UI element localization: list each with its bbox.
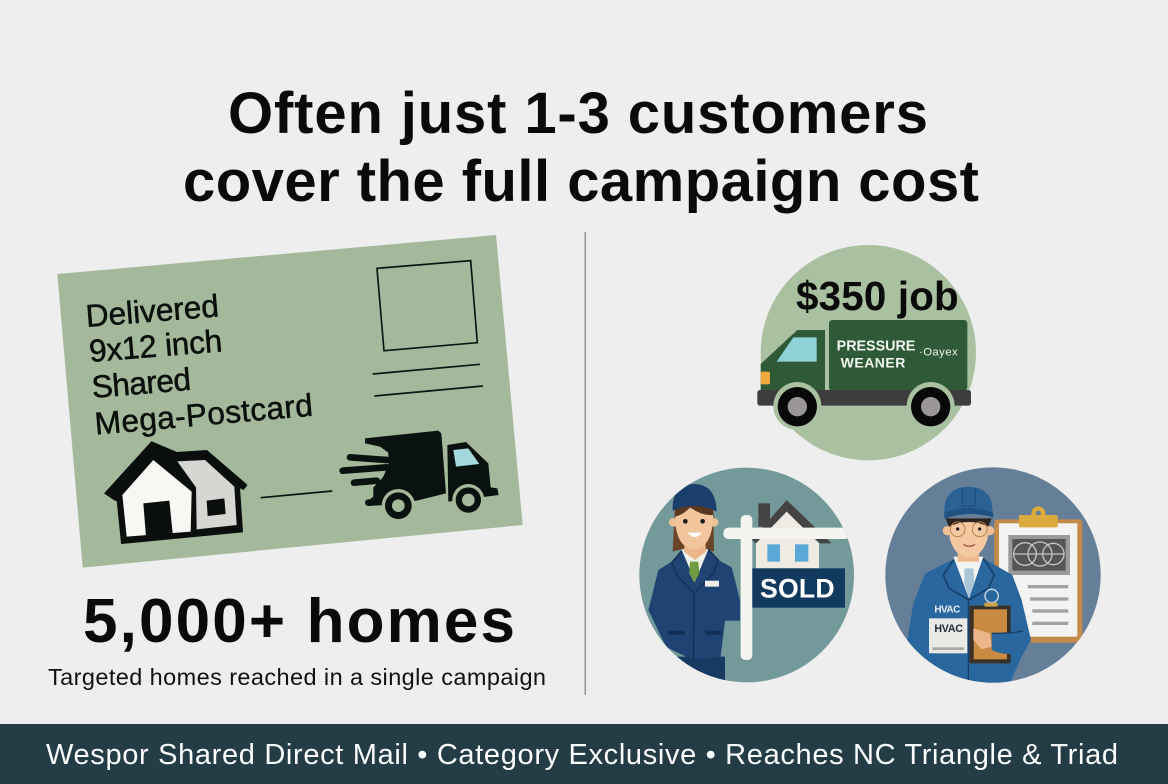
postcard text: 9x12 inch [88, 322, 223, 369]
route line [261, 491, 332, 498]
for-sale sign house [752, 500, 832, 568]
postcard text: Delivered [84, 287, 220, 334]
name badge [929, 618, 967, 653]
held clipboard [969, 603, 1031, 663]
icon: pressure washer truck [757, 245, 976, 460]
icon: hvac technician with clipboard [885, 467, 1101, 687]
footer bar: Wespor Shared Direct Mail • Category Exclusive • Reaches NC Triangle & Triad [46, 739, 1118, 771]
icon: delivery truck [343, 431, 499, 522]
panel: postcard [57, 235, 523, 568]
sold sign: SOLD [760, 573, 835, 603]
postcard address lines [373, 364, 483, 396]
postcard text: Shared [90, 361, 192, 405]
checklist clipboard [994, 506, 1082, 643]
title [183, 81, 979, 214]
technician [907, 487, 1031, 687]
agent [648, 484, 740, 687]
icon: house [105, 442, 247, 543]
sold sign [752, 568, 845, 608]
postcard stamp box [377, 261, 477, 351]
divider [584, 232, 586, 695]
headline stat: 5,000+ homes [83, 587, 515, 656]
truck lettering [837, 339, 958, 370]
truck lettering: PRESSURE [837, 339, 915, 355]
sign post [741, 515, 752, 660]
truck lettering: WEANER [841, 354, 905, 370]
stat caption: Targeted homes reached in a single campaign [48, 664, 546, 690]
icon: real estate agent with sold sign [639, 468, 854, 687]
title: Often just 1-3 customers [228, 81, 928, 146]
footer bar [0, 724, 1168, 784]
truck lettering: ·Oayex [919, 347, 958, 359]
name badge: HVAC [934, 623, 963, 635]
postcard text [84, 287, 314, 442]
job price label: $350 job [796, 273, 959, 319]
title: cover the full campaign cost [183, 149, 979, 214]
postcard text: Mega-Postcard [93, 387, 314, 442]
technician chest text: HVAC [934, 605, 960, 616]
